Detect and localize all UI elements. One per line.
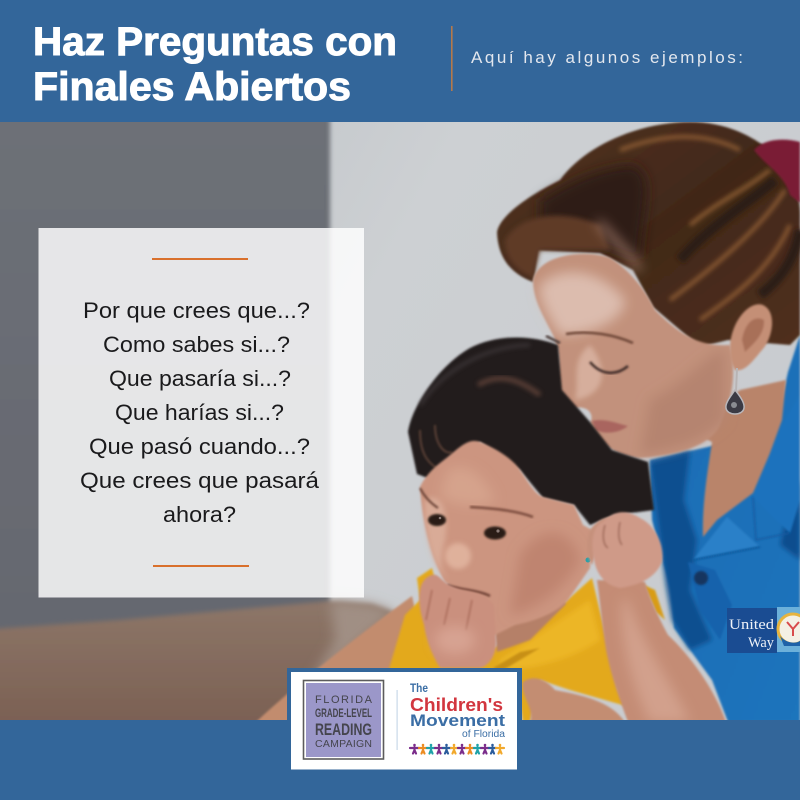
Florida Grade-Level Reading Campaign logo bbox=[304, 680, 384, 759]
The Children's Movement of Florida logo: Children's bbox=[410, 694, 503, 715]
bottom band bbox=[0, 720, 800, 800]
question list: Que harías si...? bbox=[115, 400, 284, 425]
title: Finales Abiertos bbox=[33, 65, 351, 109]
child's neck bbox=[495, 602, 566, 653]
Florida Grade-Level Reading Campaign logo: FLORIDA bbox=[315, 694, 373, 706]
row of paper-doll children bbox=[410, 744, 504, 754]
United Way patch: United bbox=[729, 617, 775, 633]
child's eyes, brows, nose bbox=[420, 488, 590, 596]
photo: woman and child reading bbox=[0, 100, 800, 740]
The Children's Movement of Florida logo: Movement bbox=[410, 711, 505, 730]
title bbox=[33, 20, 397, 109]
question list: ahora? bbox=[163, 502, 236, 527]
woman's hair bbox=[497, 122, 800, 347]
woman's blue shirt bbox=[650, 335, 800, 722]
panel: example questions bbox=[38, 228, 364, 598]
top accent line bbox=[152, 258, 248, 260]
header divider bbox=[451, 26, 453, 91]
scrunchie bbox=[754, 140, 800, 203]
woman's ear bbox=[730, 304, 772, 370]
question list: Que crees que pasará bbox=[80, 468, 320, 493]
question list bbox=[80, 298, 320, 527]
header band bbox=[0, 0, 800, 122]
logo box bbox=[287, 668, 522, 774]
subtitle: Aquí hay algunos ejemplos: bbox=[471, 48, 743, 67]
woman's hand bbox=[523, 678, 625, 722]
question list: Que pasaría si...? bbox=[109, 366, 291, 391]
logo divider bbox=[396, 690, 398, 750]
earring bbox=[726, 368, 744, 414]
background wall bbox=[0, 100, 800, 740]
child's raised arm and fist bbox=[592, 512, 726, 722]
shirt button and collar shading bbox=[693, 497, 790, 585]
bottom accent line bbox=[153, 565, 249, 567]
woman's neck bbox=[690, 380, 786, 537]
child's ear bbox=[587, 516, 610, 565]
United Way patch bbox=[727, 607, 800, 653]
The Children's Movement of Florida logo: of Florida bbox=[462, 729, 505, 740]
Florida Grade-Level Reading Campaign logo: CAMPAIGN bbox=[315, 738, 372, 750]
child's face bbox=[420, 441, 592, 636]
child's hair bbox=[408, 337, 654, 525]
question list: Por que crees que...? bbox=[83, 298, 310, 323]
Florida Grade-Level Reading Campaign logo: GRADE-LEVEL bbox=[315, 708, 372, 720]
question list: Que pasó cuando...? bbox=[89, 434, 310, 459]
Florida Grade-Level Reading Campaign logo: READING bbox=[315, 720, 372, 739]
United Way patch: Way bbox=[748, 635, 774, 651]
woman's face bbox=[533, 254, 733, 458]
woman's brow, eye and lips bbox=[546, 333, 633, 433]
The Children's Movement of Florida logo bbox=[410, 683, 505, 754]
child's yellow shirt bbox=[389, 568, 665, 722]
question list: Como sabes si...? bbox=[103, 332, 290, 357]
child's hand at mouth bbox=[419, 575, 496, 668]
woman's arm behind child bbox=[256, 596, 422, 722]
title: Haz Preguntas con bbox=[33, 20, 397, 64]
The Children's Movement of Florida logo: The bbox=[410, 683, 428, 695]
